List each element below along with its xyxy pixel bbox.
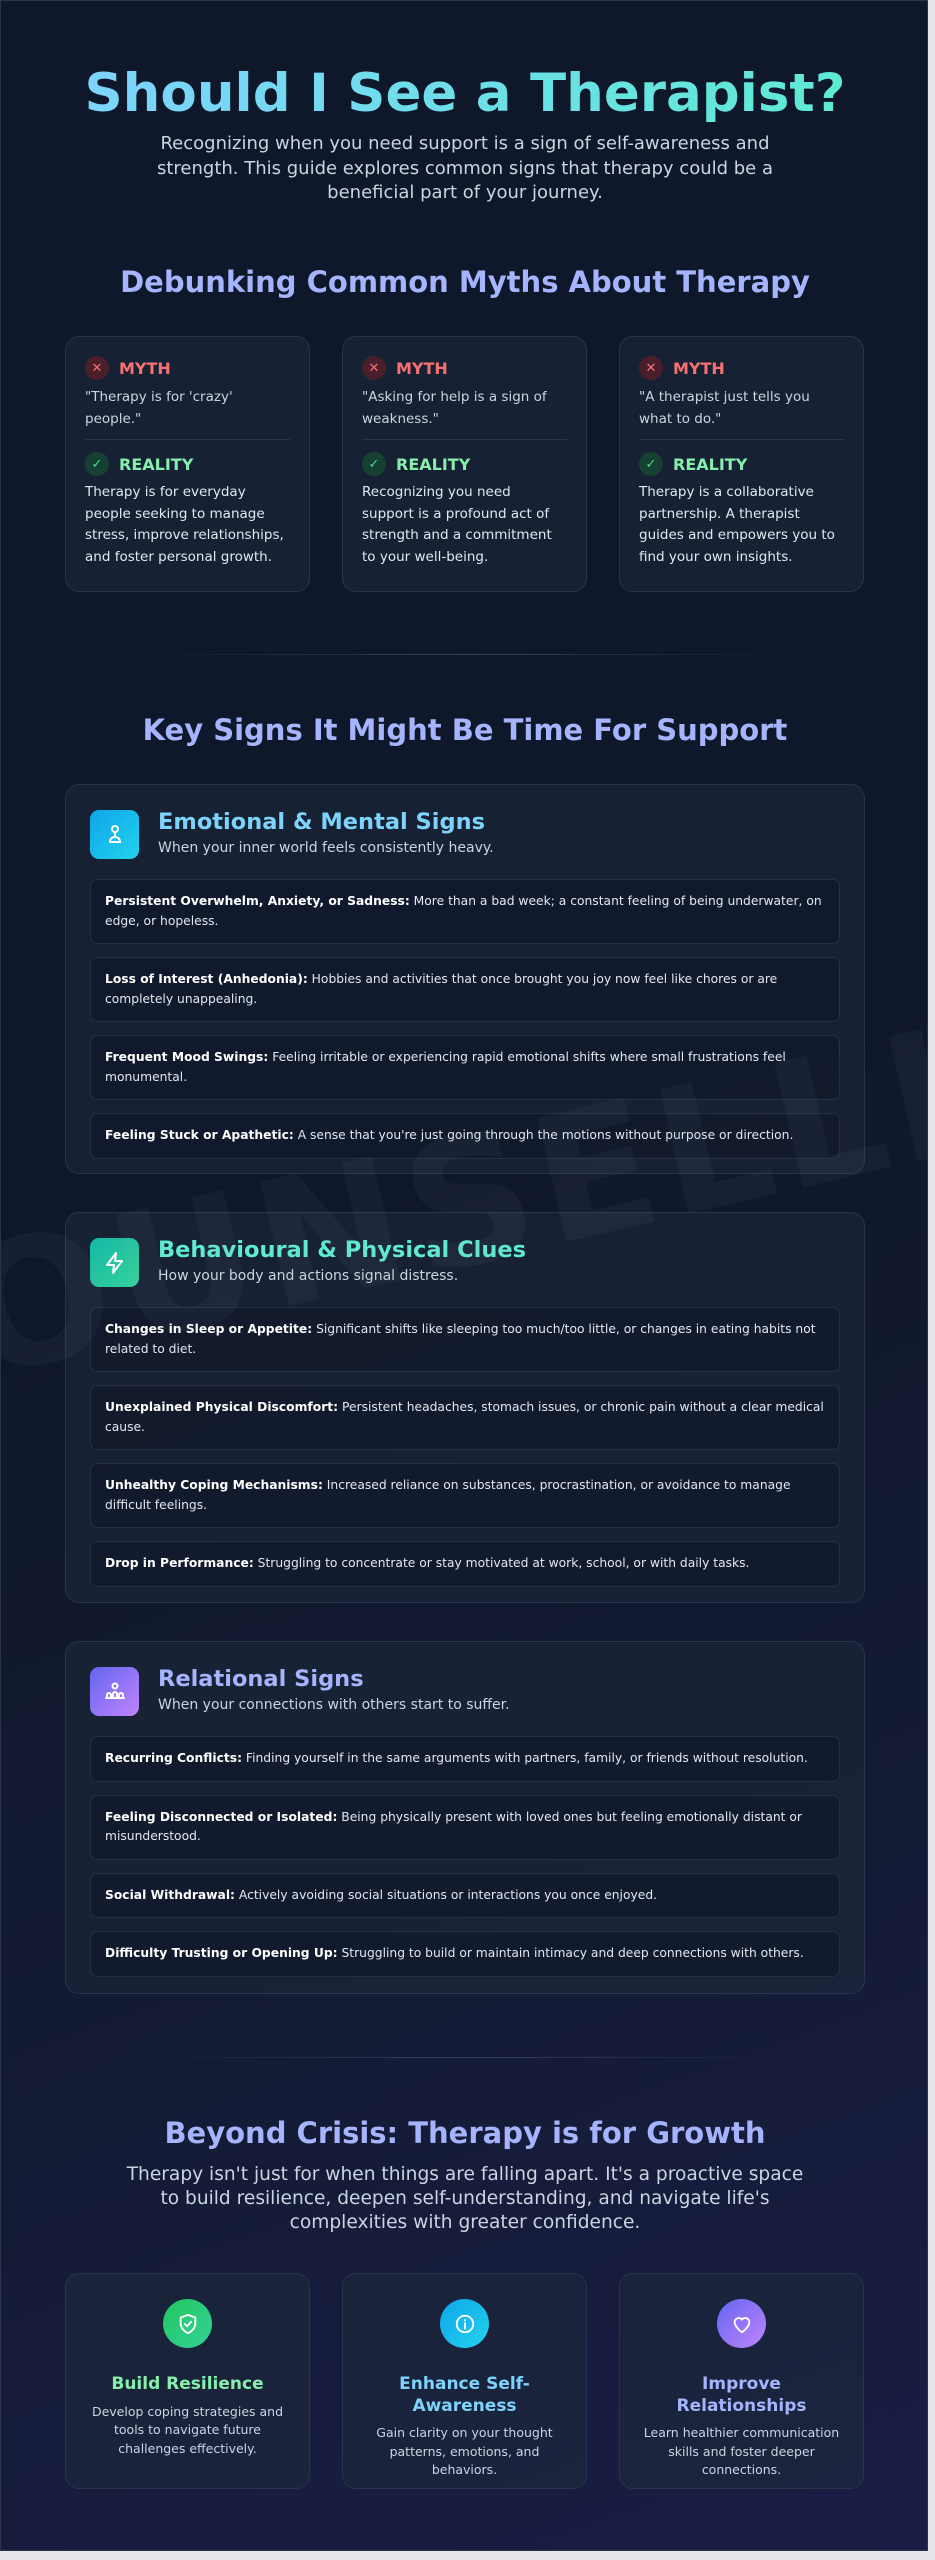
card: relationships: Learn healthier communication skills and foster deeper connections. bbox=[644, 2425, 839, 2477]
panel: behavioural: Drop in Performance: Struggling to concentrate or stay motivated at work, school, or with daily tasks. bbox=[105, 1556, 749, 1570]
icon: people bbox=[90, 1667, 139, 1716]
card: relationships: Improve bbox=[702, 2374, 781, 2394]
title: Should I See a Therapist? bbox=[84, 63, 845, 124]
myth card 2: strength and a commitment bbox=[362, 527, 552, 543]
panel: emotional: Loss of Interest (Anhedonia): Hobbies and activities that once brought you joy now feel like chores or are completely unappealing. bbox=[105, 972, 777, 1006]
panel header: When your connections with others start to suffer. bbox=[158, 1697, 510, 1713]
myth card 1: people." bbox=[85, 411, 141, 427]
panel header: When your inner world feels consistently heavy. bbox=[158, 840, 494, 856]
panel: emotional bbox=[65, 784, 865, 1174]
panel: behavioural: Changes in Sleep or Appetite: Significant shifts like sleeping too much/too little, or changes in eating habits not related to diet. bbox=[105, 1322, 816, 1356]
card: self-awareness: Gain clarity on your thought patterns, emotions, and behaviors. bbox=[376, 2425, 553, 2477]
panel header: How your body and actions signal distress. bbox=[158, 1268, 458, 1284]
growth paragraph bbox=[126, 2164, 803, 2233]
myth card 1: people seeking to manage bbox=[85, 506, 265, 522]
icon: info bbox=[440, 2299, 489, 2348]
myth card 2: to your well-being. bbox=[362, 549, 488, 565]
card: relationships bbox=[619, 2273, 864, 2489]
card: build resilience: Develop coping strategies and tools to navigate future challenges effectively. bbox=[92, 2404, 283, 2456]
card: build resilience bbox=[65, 2273, 310, 2489]
panel: relational: Feeling Disconnected or Isolated: Being physically present with loved ones but feeling emotionally distant or misunderstood. bbox=[105, 1810, 802, 1843]
panel header: Behavioural & Physical Clues bbox=[158, 1237, 526, 1263]
panel: behavioural: Unhealthy Coping Mechanisms: Increased reliance on substances, procrastination, or avoidance to manage difficult feelings. bbox=[105, 1478, 791, 1512]
myth card 1: REALITY bbox=[119, 454, 193, 474]
myth card 2 bbox=[342, 336, 587, 592]
myth card 3 bbox=[619, 336, 864, 592]
heading: key signs: Key Signs It Might Be Time For Support bbox=[143, 713, 787, 747]
panel header bbox=[90, 809, 494, 859]
myth card 3: ✓ bbox=[646, 456, 656, 472]
card: relationships: Relationships bbox=[676, 2396, 806, 2416]
myth card 3: MYTH bbox=[673, 358, 725, 378]
icon: lightning bbox=[90, 1238, 139, 1287]
myth card 1: ✓ bbox=[92, 456, 102, 472]
myth card 3: guides and empowers you to bbox=[639, 527, 835, 543]
myth card 2: support is a profound act of bbox=[362, 506, 549, 522]
panel: relational bbox=[65, 1641, 865, 1994]
icon: heart bbox=[717, 2299, 766, 2348]
myth card 3: "A therapist just tells you bbox=[639, 389, 810, 405]
myth card 1: and foster personal growth. bbox=[85, 549, 272, 565]
card: self-awareness: Awareness bbox=[412, 2396, 517, 2416]
myth card 3: Therapy is a collaborative bbox=[639, 484, 814, 500]
panel: relational: Recurring Conflicts: Finding yourself in the same arguments with partners, family, or friends without resolution. bbox=[105, 1751, 808, 1765]
myth card 3: REALITY bbox=[673, 454, 747, 474]
myth card 2: Recognizing you need bbox=[362, 484, 511, 500]
panel: behavioural: Unexplained Physical Discomfort: Persistent headaches, stomach issues, or chronic pain without a clear medical cause. bbox=[105, 1400, 824, 1434]
myth card 2: ✓ bbox=[369, 456, 379, 472]
panel: relational: Difficulty Trusting or Opening Up: Struggling to build or maintain intimacy and deep connections with others. bbox=[105, 1946, 804, 1960]
panel: emotional: Feeling Stuck or Apathetic: A sense that you're just going through the motions without purpose or direction. bbox=[105, 1128, 793, 1142]
panel header bbox=[90, 1237, 526, 1287]
myth card 3: what to do." bbox=[639, 411, 721, 427]
panel header bbox=[90, 1666, 510, 1716]
myth card 1: MYTH bbox=[119, 358, 171, 378]
growth paragraph: to build resilience, deepen self-understanding, and navigate life's bbox=[160, 2188, 770, 2209]
myth card 1 bbox=[65, 336, 310, 592]
panel header: Relational Signs bbox=[158, 1666, 364, 1692]
heading: growth: Beyond Crisis: Therapy is for Growth bbox=[164, 2116, 766, 2150]
panel: emotional: Frequent Mood Swings: Feeling irritable or experiencing rapid emotional shifts where small frustrations feel monumental. bbox=[105, 1050, 786, 1084]
myth card 3: ✕ bbox=[646, 360, 656, 376]
heading: myths: Debunking Common Myths About Therapy bbox=[120, 265, 810, 299]
card: self-awareness: Enhance Self- bbox=[399, 2374, 530, 2394]
panel header: Emotional & Mental Signs bbox=[158, 809, 485, 835]
myth card 1: "Therapy is for 'crazy' bbox=[85, 389, 233, 405]
growth paragraph: Therapy isn't just for when things are falling apart. It's a proactive space bbox=[127, 2164, 803, 2185]
icon: person bbox=[90, 810, 139, 859]
myth card 1: stress, improve relationships, bbox=[85, 527, 284, 543]
myth card 2: ✕ bbox=[369, 360, 379, 376]
growth paragraph: complexities with greater confidence. bbox=[290, 2212, 640, 2233]
myth card 2: "Asking for help is a sign of bbox=[362, 389, 547, 405]
myth card 3: partnership. A therapist bbox=[639, 506, 800, 522]
icon: shield bbox=[163, 2299, 212, 2348]
panel: behavioural bbox=[65, 1212, 865, 1603]
panel: relational: Social Withdrawal: Actively avoiding social situations or interactions you once enjoyed. bbox=[105, 1888, 657, 1902]
card: self-awareness bbox=[342, 2273, 587, 2489]
panel: emotional: Persistent Overwhelm, Anxiety, or Sadness: More than a bad week; a constant feeling of being underwater, on edge, or hopeless. bbox=[105, 894, 822, 928]
myth card 3: find your own insights. bbox=[639, 549, 793, 565]
myth card 2: REALITY bbox=[396, 454, 470, 474]
subtitle: Recognizing when you need support is a sign of self-awareness and strength. This guide explores common signs that therapy could be a beneficial part of your journey. bbox=[157, 133, 773, 203]
card: build resilience: Build Resilience bbox=[111, 2374, 264, 2394]
myth card 1: ✕ bbox=[92, 360, 102, 376]
myth card 2: weakness." bbox=[362, 411, 439, 427]
myth card 2: MYTH bbox=[396, 358, 448, 378]
myth card 1: Therapy is for everyday bbox=[85, 484, 246, 500]
